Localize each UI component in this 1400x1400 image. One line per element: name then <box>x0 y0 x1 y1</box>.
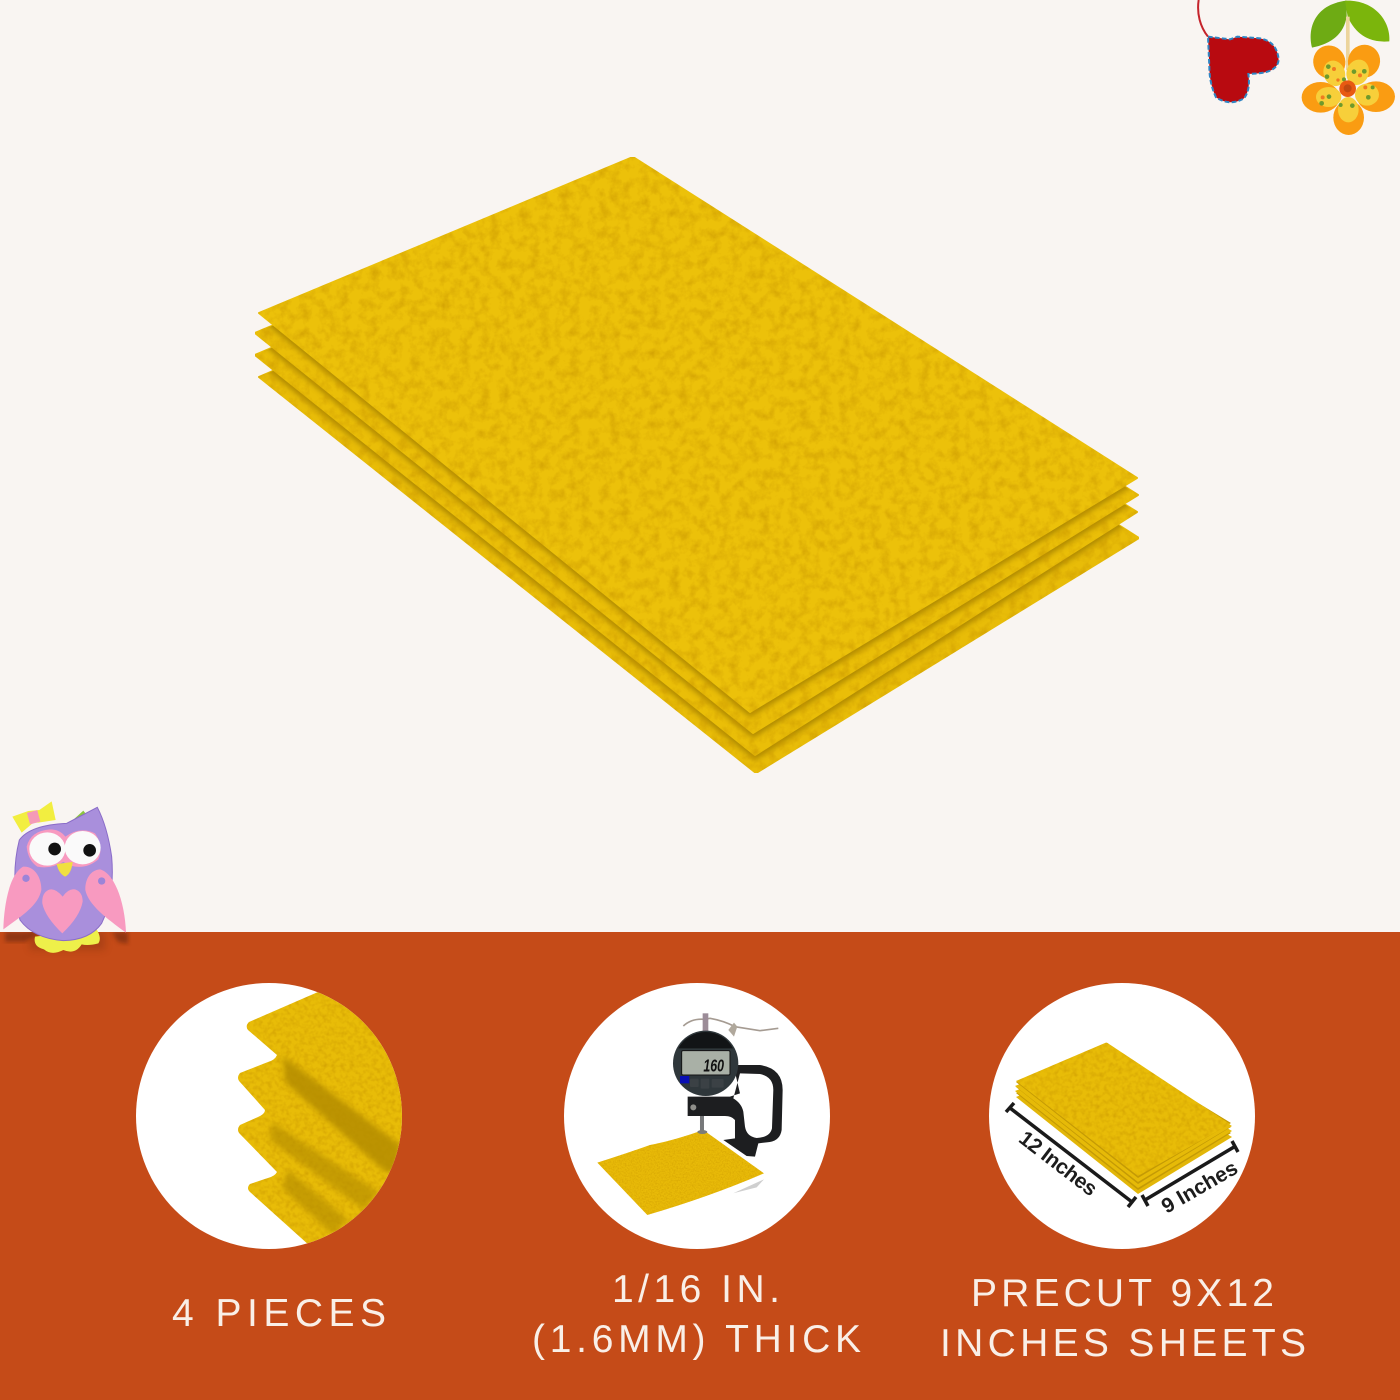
owl beak <box>57 862 73 877</box>
center button <box>1339 80 1356 97</box>
top felt sheet <box>259 157 1137 712</box>
wing buttons <box>22 875 30 882</box>
dark shadow bands between sheets <box>283 1056 400 1174</box>
panel: thickness gauge <box>564 983 830 1249</box>
9 inches dimension line <box>1142 1141 1238 1206</box>
gauge frame <box>688 1065 783 1157</box>
circle background <box>564 983 830 1249</box>
owl shadow on the band <box>5 932 128 950</box>
owl bow <box>12 801 56 833</box>
orange petals <box>1302 39 1395 135</box>
decoration: felt flower with green leaves <box>1302 1 1395 135</box>
felt sample shadow <box>733 1179 764 1193</box>
patterned yellow petals <box>1316 56 1379 122</box>
decoration: purple felt owl <box>3 801 128 953</box>
circle background <box>989 983 1255 1249</box>
12 inches label: 12 Inches <box>1014 1127 1101 1201</box>
petal pattern dots <box>1319 64 1375 108</box>
heart body <box>1208 37 1279 102</box>
panel: precut size <box>989 983 1255 1249</box>
small felt stack <box>1015 1043 1232 1194</box>
owl left wing <box>3 867 41 929</box>
green leaves <box>1311 1 1347 48</box>
caption: precut size: INCHES SHEETS <box>940 1322 1306 1365</box>
heart string <box>1198 0 1208 37</box>
layered felt edge close-up <box>238 992 402 1244</box>
orange footer band <box>0 932 1400 1400</box>
owl body <box>15 807 112 941</box>
owl eyes <box>29 832 65 866</box>
felt sample <box>597 1130 764 1215</box>
caption: 4 pieces: 4 PIECES <box>172 1292 386 1335</box>
gauge dial <box>673 1031 738 1096</box>
gauge top lever <box>683 1018 778 1031</box>
caption: precut size: PRECUT 9X12 <box>971 1272 1274 1315</box>
page background <box>0 0 1400 932</box>
owl heart <box>42 889 83 933</box>
owl feet <box>35 929 100 953</box>
12 inches dimension line <box>1006 1103 1136 1207</box>
panel: 4 pieces <box>136 983 420 1255</box>
green peek behind ear <box>69 811 86 824</box>
second felt sheet <box>255 175 1138 733</box>
owl right wing <box>85 869 126 933</box>
flower stem <box>1346 17 1350 70</box>
caption: thickness <box>532 1268 861 1361</box>
caption: thickness: 1/16 IN. <box>612 1268 780 1311</box>
caption: precut size <box>940 1272 1306 1365</box>
decoration: red felt heart on a string <box>1198 0 1279 102</box>
main image: stack of four yellow felt sheets <box>255 157 1139 773</box>
gauge reading: 160 <box>703 1055 724 1075</box>
9 inches label: 9 Inches <box>1158 1156 1242 1218</box>
owl eye surround <box>27 829 101 867</box>
circle background <box>136 983 402 1249</box>
gauge blue button <box>680 1076 689 1083</box>
gauge screen <box>682 1051 730 1075</box>
fourth felt sheet <box>259 215 1139 773</box>
gauge function buttons <box>690 1079 724 1089</box>
gauge presser pin <box>700 1116 704 1133</box>
presser foot <box>697 1130 707 1134</box>
third felt sheet <box>255 195 1137 755</box>
caption: thickness: (1.6MM) THICK <box>532 1318 861 1361</box>
